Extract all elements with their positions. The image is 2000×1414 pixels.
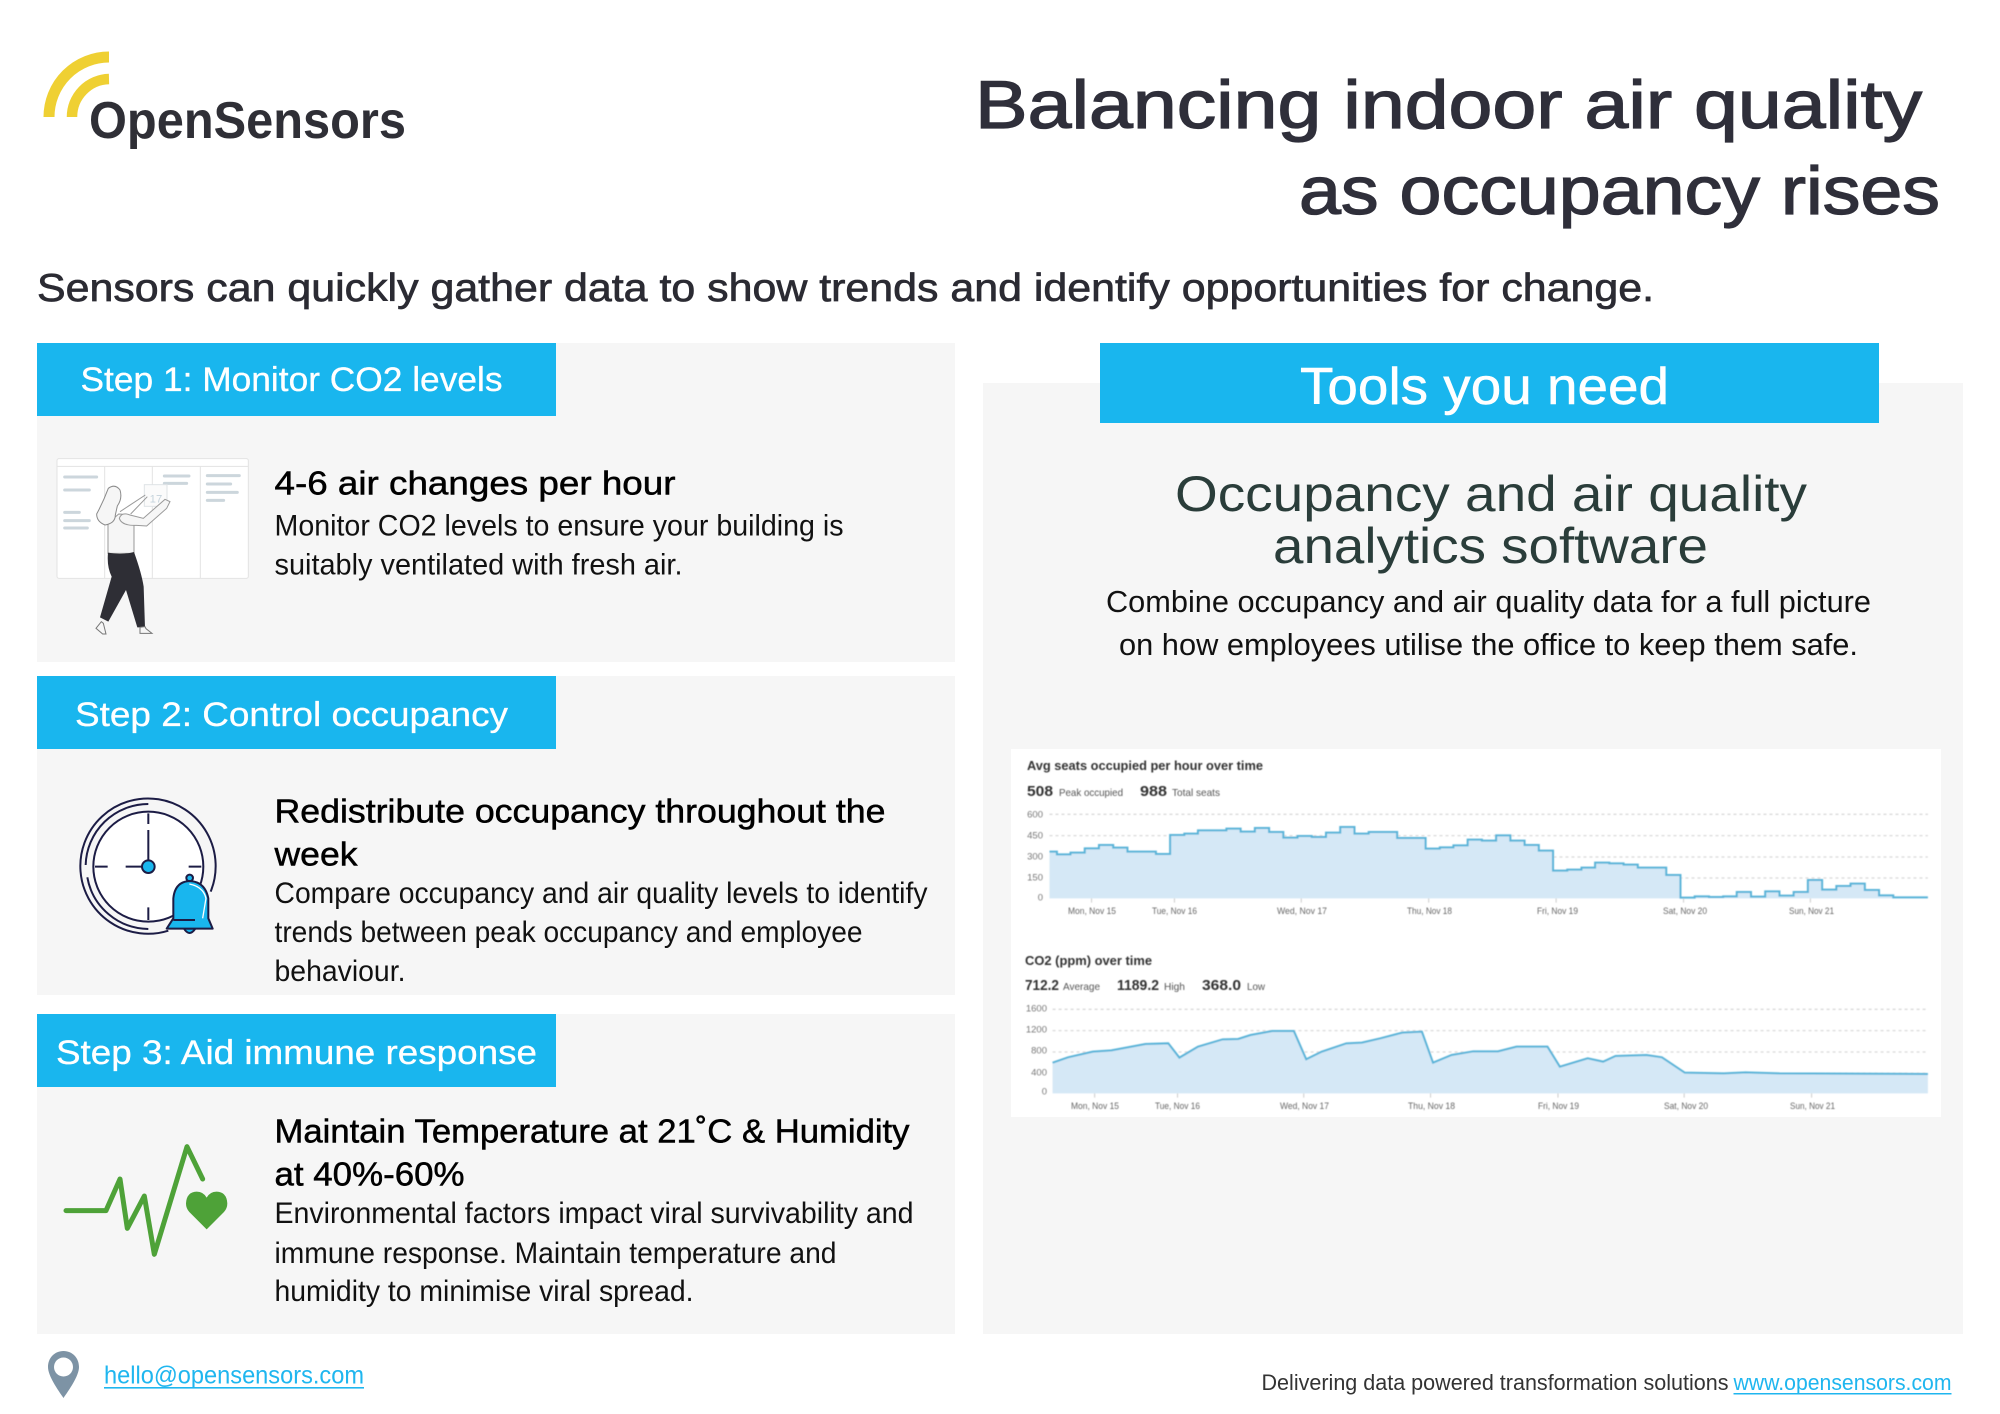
panel: step 1 monitor CO2 levels [37,343,955,662]
chart: avg seats occupied: Peak occupied [1059,787,1123,799]
chart: CO2 ppm over time: High [1164,981,1185,993]
chart: avg seats occupied: Total seats [1172,787,1220,799]
heading: redistribute occupancy: week [273,836,358,872]
logo: OpenSensors: OpenSensors [89,92,406,150]
title: as occupancy rises [1299,153,1940,229]
chart: CO2 ppm over time: Mon, Nov 15 [1071,1101,1119,1112]
chart: avg seats occupied: 300 [1027,852,1043,862]
chart: CO2 ppm over time: 712.2 [1025,978,1059,994]
chart: CO2 ppm over time: Tue, Nov 16 [1155,1101,1200,1112]
heading: temperature and humidity: at 40%-60% [274,1156,464,1192]
chart: CO2 ppm over time: Fri, Nov 19 [1538,1101,1579,1112]
body text: step 3: Environmental factors impact viral survivability and [274,1197,914,1230]
chart: avg seats occupied: 600 [1027,810,1043,820]
chart: avg seats occupied: Tue, Nov 16 [1152,906,1197,917]
chart: avg seats occupied: 988 [1140,784,1167,800]
heading: redistribute occupancy [273,792,886,872]
chart: CO2 ppm over time: 0 [1042,1086,1047,1098]
chart: avg seats occupied: Fri, Nov 19 [1537,906,1578,917]
heading: temperature and humidity [274,1112,910,1192]
chart: CO2 ppm over time: 800 [1031,1046,1047,1056]
footer tagline and website [1262,1370,1952,1395]
tools tab [1100,343,1879,423]
heading: analytics software: Occupancy and air quality [1175,466,1807,522]
chart: CO2 ppm over time: Low [1247,981,1265,993]
body text: step 2: Compare occupancy and air quality levels to identify [274,877,928,910]
title: Balancing indoor air quality [975,67,1922,143]
panel: step 2 control occupancy [37,676,955,995]
chart: CO2 ppm over time: 1189.2 [1117,978,1159,994]
body text: tools: on how employees utilise the office to keep them safe. [1119,627,1858,662]
title [975,67,1940,229]
panel: step 3 aid immune response [37,1014,955,1334]
icon: clock with bell [80,798,216,934]
chart: CO2 ppm over time: Sat, Nov 20 [1664,1101,1708,1112]
step 1 tab [37,343,556,416]
body text: step 2 [274,877,928,988]
chart: avg seats occupied: 508 [1027,784,1053,800]
body text: tools: Combine occupancy and air quality data for a full picture [1106,584,1871,619]
step 2 tab: Step 2: Control occupancy [75,696,508,734]
heading: analytics software: analytics software [1273,518,1708,574]
body text: tools [1106,584,1871,662]
dashboard screenshot [1011,749,1941,1117]
chart: avg seats occupied: 450 [1027,830,1043,842]
chart: avg seats occupied: Mon, Nov 15 [1068,906,1116,917]
body text: step 1: Monitor CO2 levels to ensure your building is [274,510,844,542]
chart: avg seats occupied: Avg seats occupied per hour over time [1027,759,1263,773]
footer tagline and website: www.opensensors.com [1733,1370,1952,1395]
chart: avg seats occupied: Sun, Nov 21 [1789,906,1834,917]
heading: temperature and humidity: Maintain Temperature at 21˚C & Humidity [274,1112,910,1150]
body text: step 2: behaviour. [274,955,406,988]
footer email link: hello@opensensors.com [104,1362,364,1390]
logo: OpenSensors [49,57,406,150]
chart: avg seats occupied: Sat, Nov 20 [1663,906,1707,917]
icon: person at calendar board [57,459,248,634]
chart: CO2 ppm over time: Average [1063,981,1100,993]
chart: CO2 ppm over time: Sun, Nov 21 [1790,1101,1835,1112]
chart: CO2 ppm over time: Thu, Nov 18 [1408,1101,1455,1112]
icon: person at calendar board: 17 [150,493,162,505]
chart: avg seats occupied: 150 [1027,872,1043,884]
icon: location pin [48,1351,79,1398]
heading: analytics software [1175,466,1807,574]
body text: step 3: humidity to minimise viral spread. [274,1275,694,1308]
chart: avg seats occupied [1027,759,1928,917]
chart: avg seats occupied: 0 [1038,892,1043,904]
chart: CO2 ppm over time: CO2 (ppm) over time [1025,954,1152,968]
step 3 tab [37,1014,556,1087]
body text: step 3 [274,1197,914,1308]
subtitle: Sensors can quickly gather data to show trends and identify opportunities for change. [37,267,1654,310]
step 3 tab: Step 3: Aid immune response [56,1034,537,1072]
step 1 tab: Step 1: Monitor CO2 levels [80,361,503,399]
chart: CO2 ppm over time: 368.0 [1202,978,1241,994]
icon: heartbeat with heart [66,1147,227,1254]
chart: avg seats occupied: Wed, Nov 17 [1277,906,1327,917]
chart: CO2 ppm over time: 1200 [1026,1024,1047,1036]
heading: redistribute occupancy: Redistribute occupancy throughout the [274,792,886,830]
chart: CO2 ppm over time: 1600 [1026,1004,1047,1014]
chart: CO2 ppm over time [1025,954,1928,1112]
heading: air changes: 4-6 air changes per hour [274,464,676,502]
chart: avg seats occupied: Thu, Nov 18 [1407,906,1452,917]
body text: step 2: trends between peak occupancy and employee [274,916,862,949]
tools tab: Tools you need [1300,358,1669,416]
chart: CO2 ppm over time: 400 [1031,1068,1047,1078]
chart: CO2 ppm over time: Wed, Nov 17 [1280,1101,1329,1112]
body text: step 1 [274,510,844,582]
step 2 tab [37,676,556,749]
body text: step 3: immune response. Maintain temperature and [274,1237,836,1270]
panel: tools you need [983,343,1963,1334]
footer tagline and website: Delivering data powered transformation solutions [1262,1370,1728,1395]
body text: step 1: suitably ventilated with fresh air. [274,548,682,582]
